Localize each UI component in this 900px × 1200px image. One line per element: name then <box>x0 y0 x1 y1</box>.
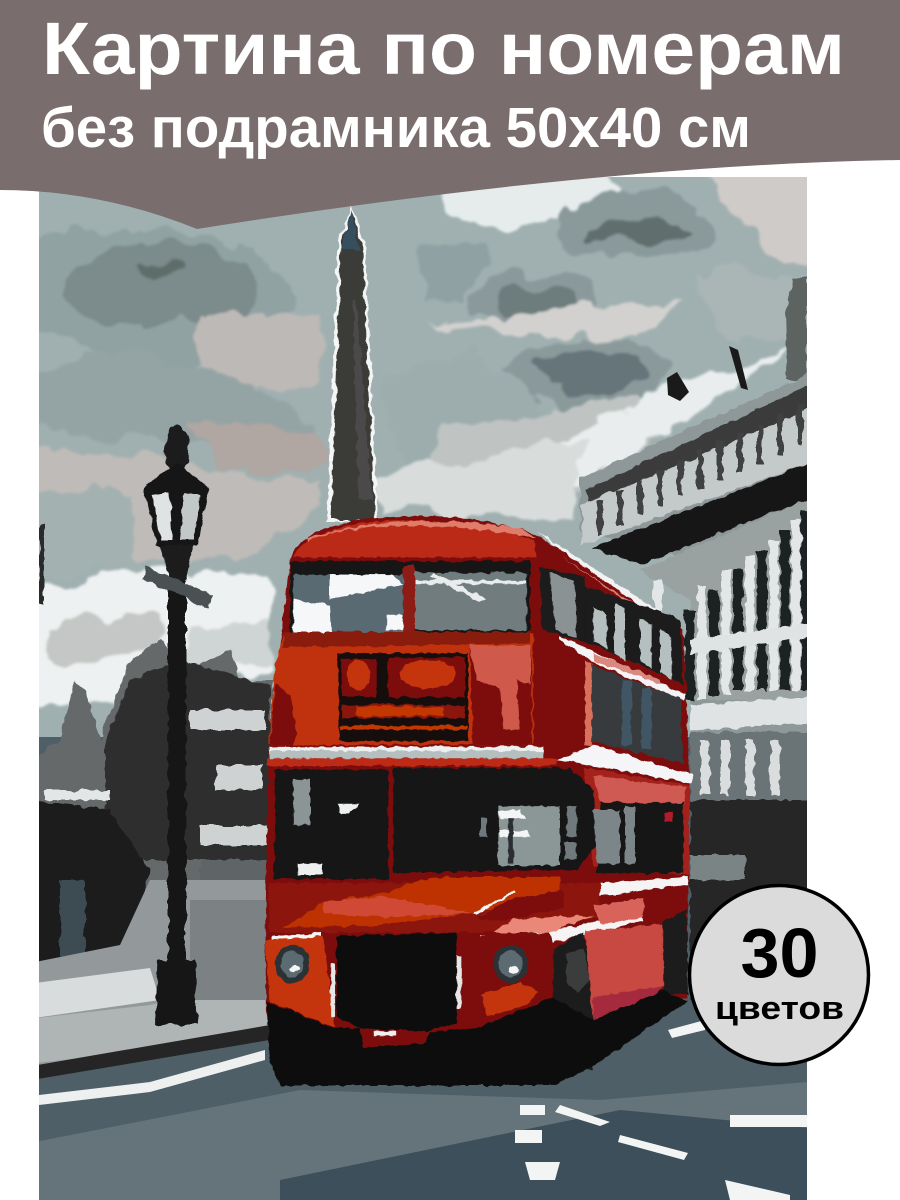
header banner <box>0 0 900 229</box>
ground base <box>39 737 700 1072</box>
bumper and underside <box>267 990 687 1086</box>
side upper windows <box>540 567 687 701</box>
birds <box>667 346 748 401</box>
side lower-saloon dark glass upper <box>592 665 683 764</box>
destination panel <box>338 653 468 741</box>
number plate <box>373 1031 397 1036</box>
badge: 30 colours <box>690 886 868 1064</box>
subtitle: без подрамника 50х40 см <box>41 96 751 160</box>
painting: London bus scene <box>20 165 830 1200</box>
upper deck roof <box>293 520 537 557</box>
obelisk <box>327 206 378 522</box>
buildings and pedestrians, left <box>20 525 272 965</box>
radiator grille <box>337 932 457 1032</box>
front wings <box>265 932 557 1032</box>
front upper windows <box>283 561 530 647</box>
headlights <box>275 945 528 1017</box>
bonnet <box>268 877 643 944</box>
side lower panel <box>583 768 690 875</box>
lower windows <box>273 768 683 879</box>
badge label: цветов <box>715 990 844 1026</box>
white mid band <box>267 745 693 783</box>
sky with clouds <box>20 165 830 737</box>
badge number: 30 <box>740 914 818 992</box>
upper deck front band <box>268 634 533 745</box>
road <box>39 1021 807 1200</box>
side panel band <box>585 661 593 745</box>
double-decker bus <box>265 516 693 1086</box>
bus body <box>265 516 690 1063</box>
wheel and side skirt <box>553 877 688 1070</box>
pavement <box>39 880 270 1079</box>
street lamp <box>143 425 212 1025</box>
tall building, right <box>580 276 830 1000</box>
title: Картина по номерам <box>42 7 845 90</box>
